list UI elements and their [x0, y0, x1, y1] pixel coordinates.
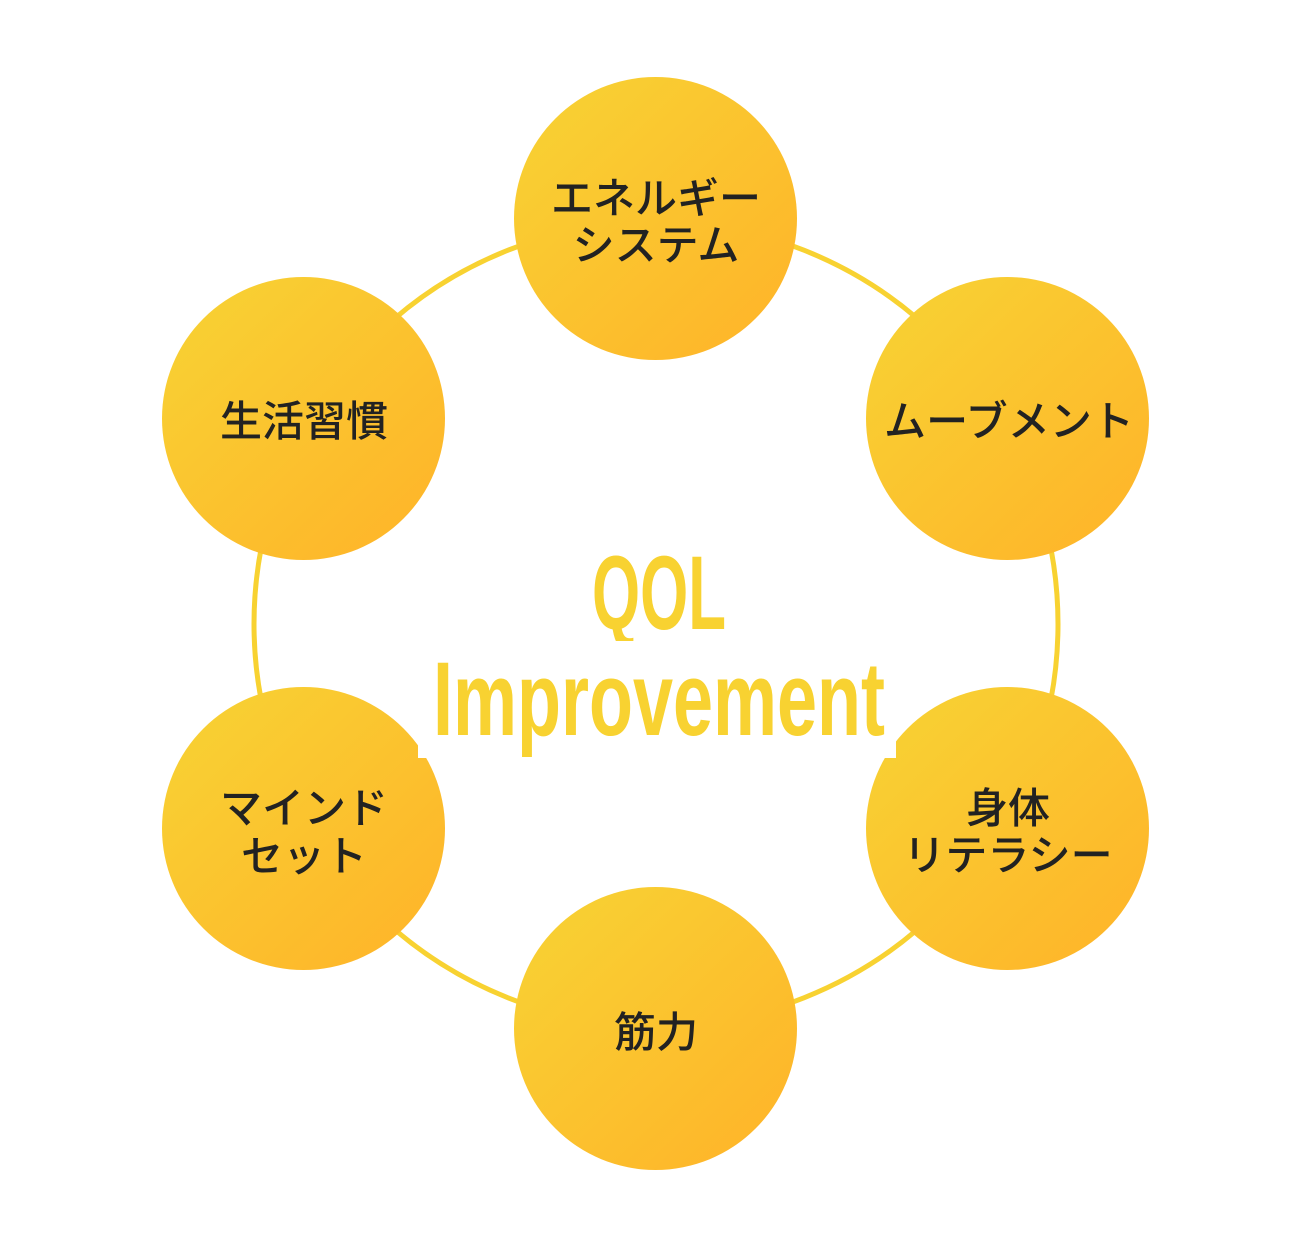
node: body literacy: 身体	[966, 785, 1050, 832]
connecting ring	[254, 222, 1058, 1026]
node: mindset	[162, 687, 445, 970]
node: muscle strength: 筋力	[614, 1009, 698, 1056]
node: movement: ムーブメント	[884, 398, 1134, 445]
node: mindset: マインド	[220, 785, 388, 832]
node: energy system: エネルギー	[551, 175, 761, 222]
center title: QOL	[592, 535, 726, 652]
node: energy system: システム	[573, 222, 739, 269]
QOL improvement cycle diagram	[162, 77, 1149, 1170]
center title	[438, 556, 884, 757]
node: body literacy: リテラシー	[903, 832, 1113, 879]
node: body literacy	[866, 687, 1149, 970]
node: lifestyle habits	[162, 277, 445, 560]
node: muscle strength	[514, 887, 797, 1170]
node: lifestyle habits: 生活習慣	[220, 398, 388, 445]
node: movement	[866, 277, 1149, 560]
white title backing box	[418, 641, 896, 758]
node: energy system	[514, 77, 797, 360]
center title: Improvement	[433, 641, 885, 758]
node: mindset: セット	[241, 833, 367, 880]
